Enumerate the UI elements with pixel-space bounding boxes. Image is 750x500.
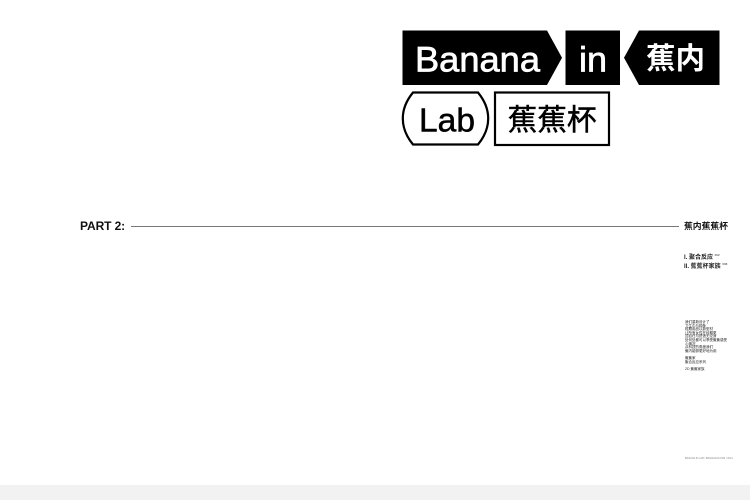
logo tag: 蕉蕉杯 [495, 92, 609, 145]
description text block: 心情况 [685, 342, 696, 346]
logo tag: in [566, 30, 620, 85]
description text block [685, 320, 727, 371]
divider line [131, 226, 679, 227]
logo tag: Lab: Lab [419, 102, 475, 140]
description text block: 2D 蕉蕉家族 [685, 367, 704, 371]
description text block: 蕉内能够更好地为用 [685, 349, 716, 353]
footer note: BANANA IN LAB / BANANAIN.COM / 2021 [685, 456, 733, 460]
logo tag: 蕉内 [624, 30, 720, 85]
heading: PART 2: PART 2: [80, 219, 125, 233]
heading: 蕉内蕉蕉杯: 蕉内蕉蕉杯 [684, 221, 728, 231]
logo tag: Banana [402, 30, 562, 85]
description text block: 处何处都可以享受蕉蕉感受 [685, 338, 727, 342]
table of contents [684, 252, 728, 270]
logo tag: 蕉内: 蕉内 [646, 42, 705, 76]
logo tag: in: in [579, 40, 607, 80]
bottom band [0, 485, 750, 500]
description text block: 让所有女性在经期更 [685, 331, 716, 335]
logo tag: Banana: Banana [415, 40, 541, 80]
logo tag: Lab [403, 92, 488, 144]
description text block: 加自在与舒适无论身 [685, 334, 716, 338]
title logo: Banana in Lab [402, 30, 720, 146]
description text block: 我们重新设计了 [685, 320, 710, 324]
description text block: 聚合反应系列 [685, 360, 706, 364]
table of contents: I. 聚合反应 002 [684, 252, 720, 260]
table of contents: II. 蕉蕉杯家族 008 [684, 262, 727, 270]
description text block: 从科技的角度我们 [685, 345, 713, 349]
description text block: 蕉蕉家 [685, 356, 696, 360]
description text block: 卫生巾与棉条 [685, 324, 706, 328]
description text block: 经期用品以新型材 [685, 327, 713, 331]
logo tag: 蕉蕉杯: 蕉蕉杯 [508, 104, 597, 137]
